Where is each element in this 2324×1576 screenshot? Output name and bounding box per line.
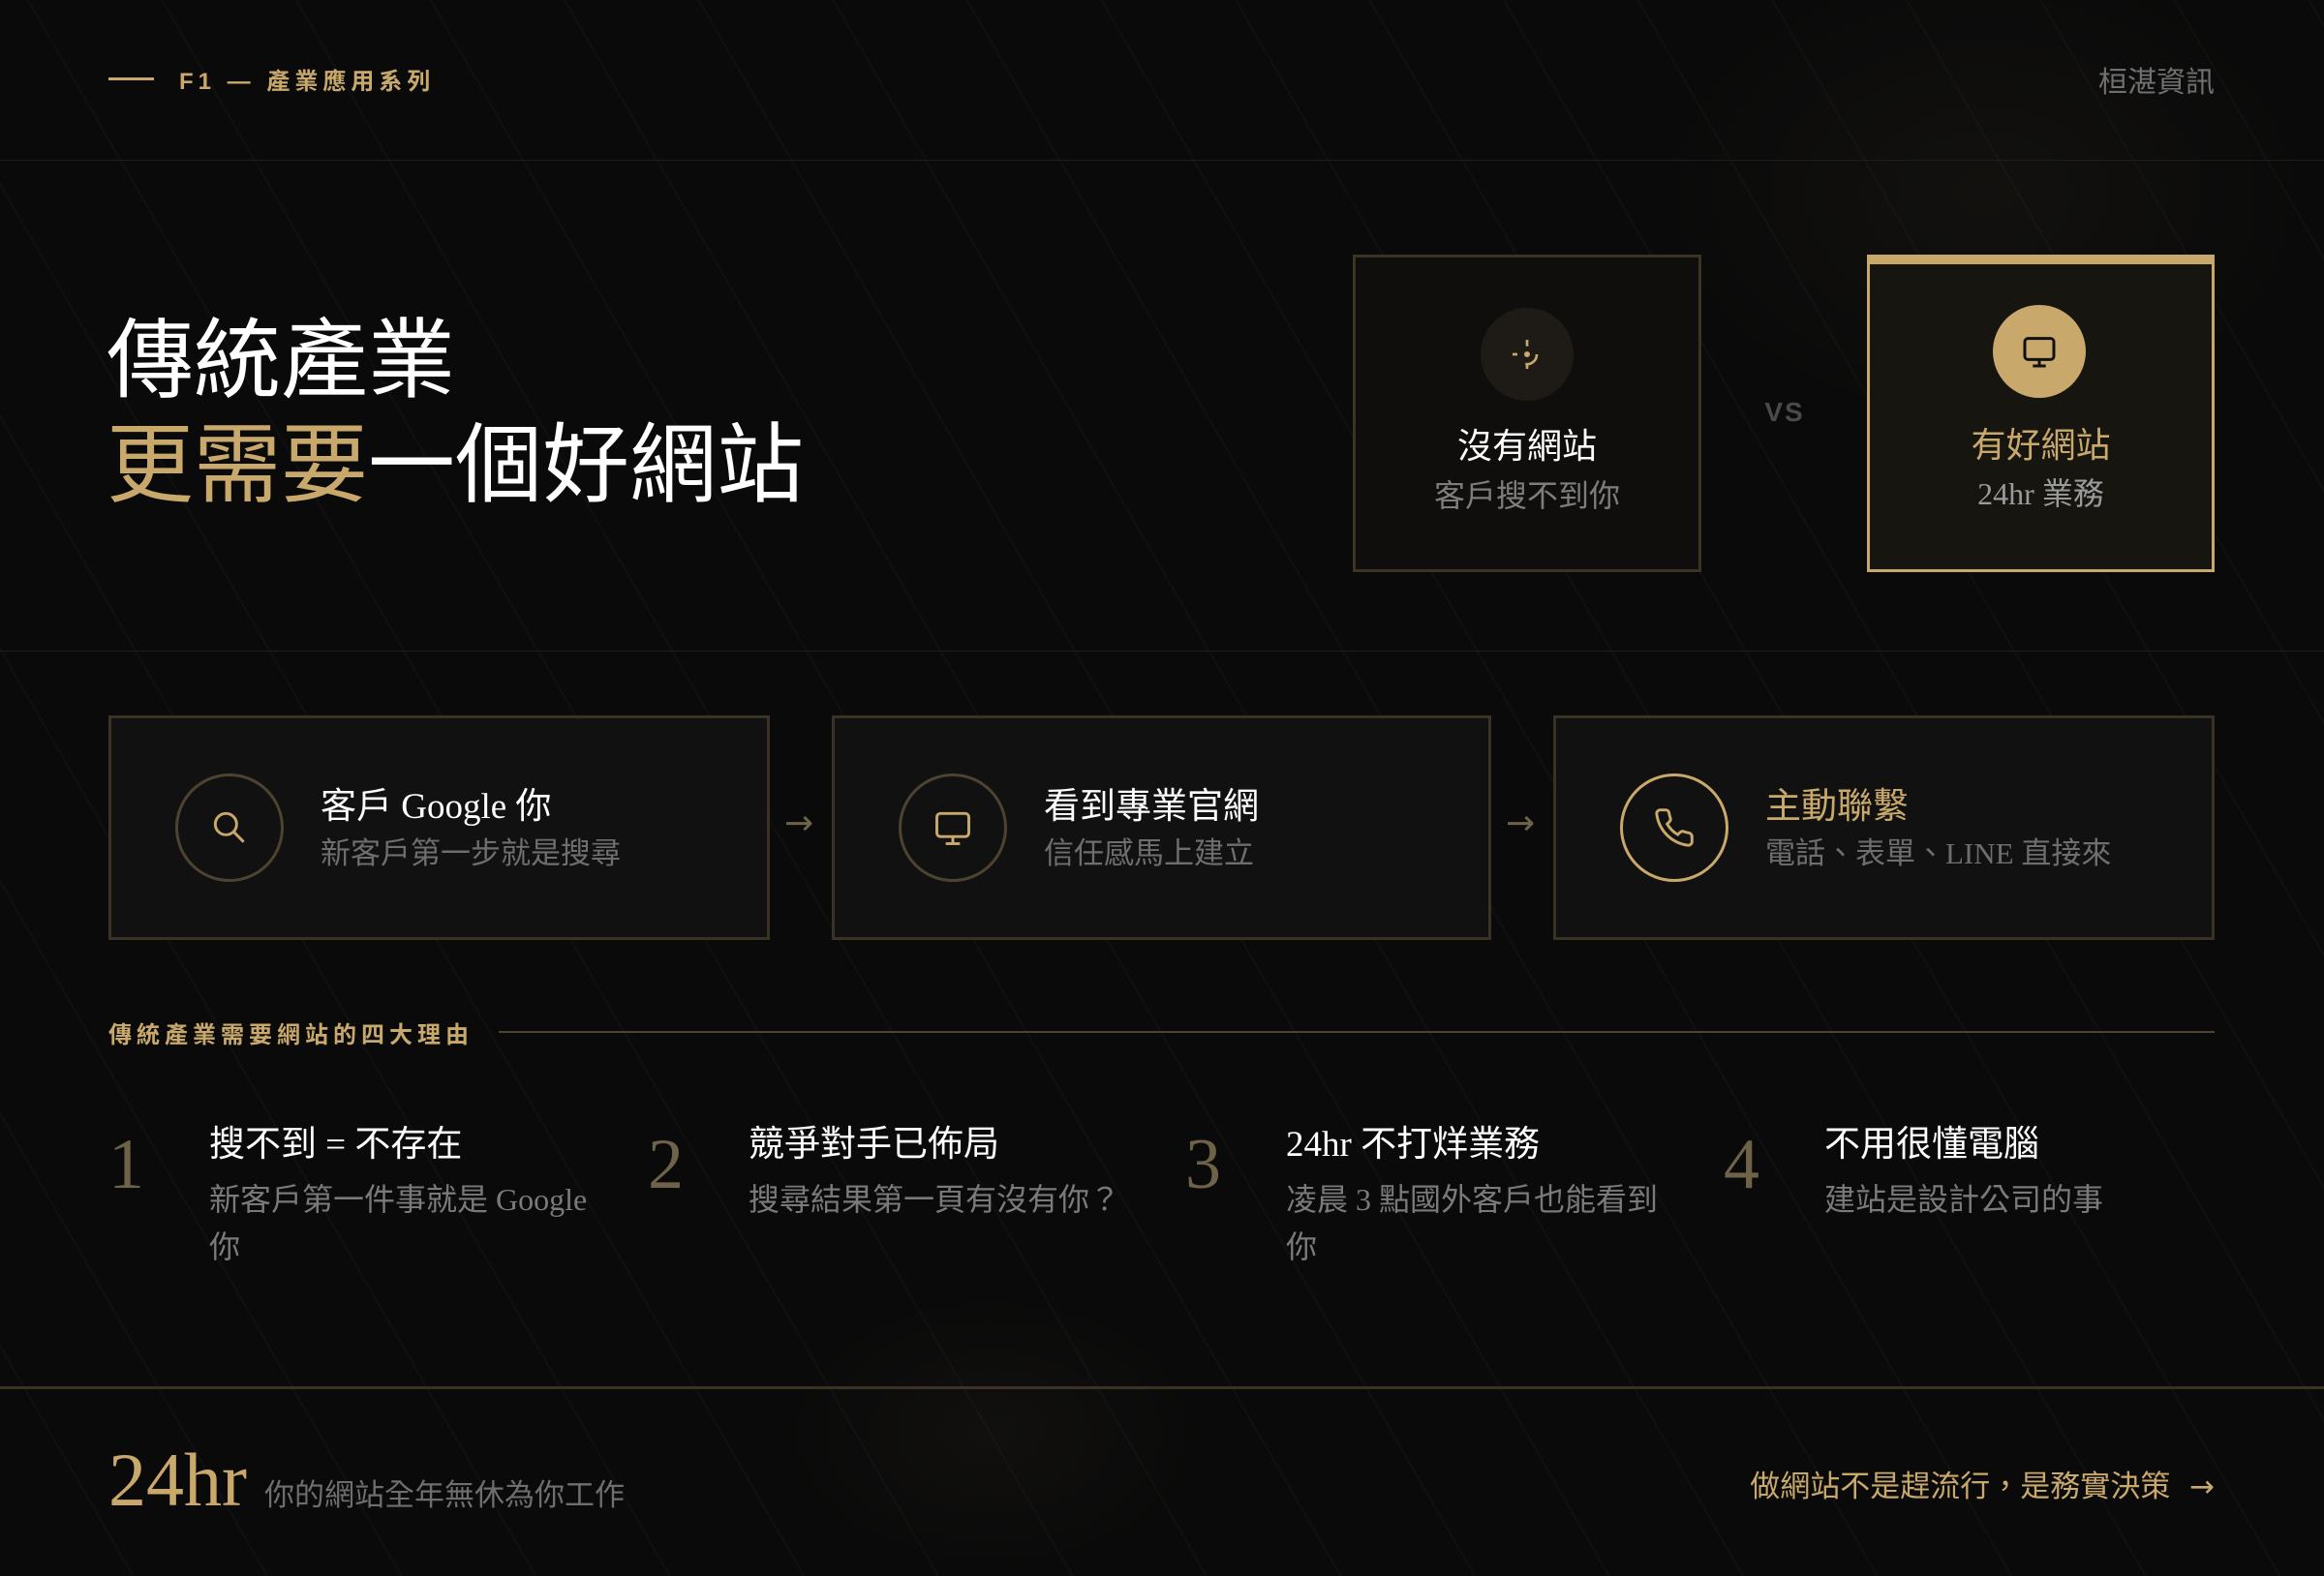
step 3: 電話、表單、LINE 直接來: [1765, 836, 2111, 870]
footer stat: [108, 1438, 625, 1522]
footer tagline: 做網站不是趕流行，是務實決策 →: [1750, 1470, 2215, 1504]
icon: search: [175, 773, 284, 882]
title: 更需要一個好網站: [107, 418, 804, 514]
brand: 桓湛資訊: [2098, 67, 2215, 99]
reason 1: [108, 1125, 587, 1264]
text: 有好網站: [1971, 426, 2111, 465]
reason 2: 搜尋結果第一頁有沒有你？: [749, 1182, 1120, 1217]
reason 4: 4: [1724, 1125, 1759, 1204]
reason 1: 1: [108, 1125, 144, 1204]
card: no website: [1353, 255, 1701, 572]
card: no website: 客戶搜不到你: [1434, 478, 1620, 513]
step 3: [1553, 715, 2215, 940]
title: 傳統產業: [107, 314, 455, 409]
card: good website: 24hr 業務: [1977, 476, 2104, 511]
reason 2: [648, 1125, 1120, 1217]
icon: phone: [1620, 773, 1728, 882]
step 1: 客戶 Google 你: [321, 787, 551, 827]
reason 4: [1724, 1125, 2103, 1217]
step 2: [832, 715, 1491, 940]
reason 2: 競爭對手已佈局: [749, 1125, 999, 1165]
vs: VS: [1764, 397, 1805, 427]
arrow: →: [1506, 803, 1535, 843]
icon: monitor: [899, 773, 1007, 882]
card: good website: [1867, 255, 2215, 572]
icon: monitor: [1993, 305, 2086, 398]
step 1: [108, 715, 770, 940]
arrow: →: [784, 803, 813, 843]
reason 4: 不用很懂電腦: [1824, 1125, 2039, 1165]
reason 4: 建站是設計公司的事: [1824, 1182, 2103, 1217]
reason 3: 凌晨 3 點國外客戶也能看到你: [1286, 1182, 1658, 1264]
reason 3: 24hr 不打烊業務: [1286, 1125, 1540, 1165]
footer stat: 24hr: [108, 1438, 247, 1522]
reason 3: [1185, 1125, 1658, 1264]
title: [107, 314, 804, 514]
reason 3: 3: [1185, 1125, 1221, 1204]
reason 1: 新客戶第一件事就是 Google 你: [209, 1182, 587, 1264]
step 2: 信任感馬上建立: [1044, 836, 1254, 870]
step 1: 新客戶第一步就是搜尋: [321, 836, 621, 870]
footer stat: 你的網站全年無休為你工作: [264, 1478, 625, 1512]
icon: broken: [1481, 308, 1574, 401]
step 3: 主動聯繫: [1765, 787, 1909, 827]
step 2: 看到專業官網: [1044, 787, 1259, 827]
reason 1: 搜不到 = 不存在: [209, 1125, 462, 1165]
reason 2: 2: [648, 1125, 684, 1204]
section label: 傳統產業需要網站的四大理由: [108, 1022, 474, 1047]
header label: F1 — 產業應用系列: [179, 68, 435, 95]
text: 沒有網站: [1457, 427, 1597, 466]
